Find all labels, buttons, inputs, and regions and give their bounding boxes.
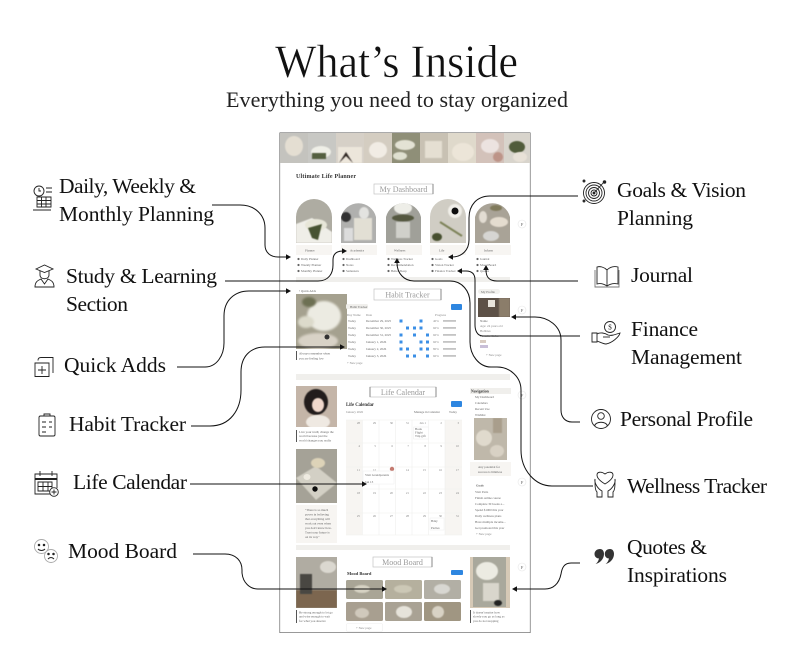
label: daily weekly monthly planning: Monthly Planning [59,202,214,226]
goals list: Get promoted this year [475,526,505,530]
dashboard sublinks: Wellness Tracker [391,257,414,261]
calendar: 20 [390,491,393,495]
arrow: study and learning [225,248,347,281]
quote box: that everything will [305,517,330,521]
label: wellness tracker: Wellness Tracker [627,474,767,498]
dashboard sublinks: Weekly Planner [301,263,322,267]
calendar: Manage in Calendar [414,410,441,414]
goals list: Visit Paris [475,490,489,494]
calendar: 30 [390,421,393,425]
habit table: January 1, 2026 [366,340,387,345]
heading: mood board [373,557,432,567]
calendar: 4 [358,444,360,448]
round side buttons [518,220,526,571]
calendar: 28 [406,514,409,518]
quote text: you do not stopping [473,619,499,623]
dashboard link cards: Planner [305,248,316,252]
label: daily weekly monthly planning [33,174,214,226]
quote text: world changes you really [299,438,332,442]
calendar: 5 [374,444,376,448]
quote text: Live your truth; change the [299,430,334,434]
photo: desk [296,557,337,608]
quote text: slowly you go as long as [473,614,505,618]
label: mood board: Mood Board [68,539,177,563]
icon: quotation marks [594,549,614,564]
calendar: Jan 1 [419,421,426,425]
goals list: Have multiple income... [475,520,506,524]
mood board gallery: Mood Board [347,571,372,576]
habit table: Today [348,333,356,337]
dashboard sublinks: Recommendation [391,263,414,267]
habit table: Today [348,326,356,330]
heading: life calendar: Life Calendar [381,388,425,397]
calendar: Life Calendar [346,403,374,408]
calendar: Flight [415,430,423,434]
dashboard sublinks: Better Sleep [391,269,407,273]
calendar: 27 [390,514,393,518]
calendar: 25 [357,514,360,518]
dashboard sublinks: Semesters [346,269,360,273]
my profile card: Hobbies [480,329,491,333]
my profile card: Age: 24 years old [480,324,503,328]
quote text [296,610,333,623]
dashboard link cards: Wellness [394,248,406,252]
calendar: 12 [373,468,376,472]
calendar: 8 [424,444,426,448]
navigation sidebar: My Dashboard [475,395,494,399]
label: goals and vision [583,178,746,230]
panel: planner screenshot [280,132,530,633]
calendar: 26 [373,514,376,518]
calendar: 31 [406,421,409,425]
calendar: 17 [456,468,459,472]
profile photo [478,298,510,317]
habit table: December 31, 2025 [366,333,391,338]
subtitle: Everything you need to stay organized [226,87,568,112]
habit table: 60% [433,333,439,337]
calendar: 19 [373,491,376,495]
arrow: finance [457,268,580,336]
navigation sidebar: Any potential for [478,465,501,469]
calendar: 18 [357,491,360,495]
calendar: Visit Grandparents [365,473,390,477]
habit table: 60% [433,340,439,344]
icon: graduate [35,265,54,287]
navigation sidebar: Wishlist [475,413,486,417]
dashboard sublinks: Goals [435,257,443,261]
quote box: "There is so much [305,508,329,512]
calendar: 24 [456,491,459,495]
quote box: on its way" [305,535,320,539]
label: personal profile: Personal Profile [620,407,753,431]
my profile card: Favorite Color [480,334,500,338]
habit table: Today [348,340,356,344]
icon: clock and grid [33,186,52,210]
dashboard sublinks: Finance Tracker [435,269,457,273]
my profile card [478,289,510,357]
quote box [296,505,337,543]
quote box: power in believing [305,512,329,516]
round side buttons: F [521,480,524,485]
dashboard sublinks: Journal [480,257,489,261]
label: quick adds: Quick Adds [64,353,166,377]
photo: white flowers [296,294,347,349]
arch photo: inform [475,203,510,243]
quote text [296,430,334,442]
calendar: 10 [456,444,459,448]
habit table: 40% [433,319,439,323]
navigation sidebar: Recent Use [475,407,490,411]
calendar: 7 [407,444,409,448]
dashboard sublinks: Monthly Planner [301,269,323,273]
label: finance management: Finance [631,317,698,341]
label: finance management: Management [631,345,742,369]
calendar: Today [449,410,457,414]
label: goals and vision: Goals & Vision [617,178,746,202]
round side buttons: F [521,393,524,398]
label: habit tracker: Habit Tracker [69,412,186,436]
goals list: Spend $1000 this year [475,508,504,512]
arrow: habit tracker [191,344,345,426]
arch photo: life [430,199,466,243]
icon: open book [595,267,619,287]
label: quotes and inspirations [594,535,727,587]
calendar: 15 [423,468,426,472]
calendar: 16 [439,468,442,472]
quote text: It doesn't matter how [473,610,501,614]
heading: mood board: Mood Board [382,558,423,567]
my profile card: My Profile [481,290,495,294]
calendar: Bday [431,519,438,523]
navigation sidebar: Calendars [475,401,489,405]
calendar: 6 [391,444,393,448]
navigation sidebar [470,388,511,476]
dashboard sublinks: Daily Planner [301,257,320,261]
arch photo: wellness [386,203,421,243]
habit table: 60% [433,326,439,330]
label: quotes and inspirations: Quotes & [627,535,707,559]
icon: person in circle [592,410,610,428]
label: study and learning: Study & Learning [66,264,217,288]
quote text: for what you deserve [299,619,326,623]
arrow: quotes and inspirations [512,563,580,592]
label: daily weekly monthly planning: Daily, Weekly & [59,174,196,198]
habit table: December 29, 2025 [366,319,391,324]
arrow: quick adds [177,288,291,367]
dashboard sublinks: Vision Tracker [435,263,455,267]
round side buttons: F [521,565,524,570]
calendar: Jan 13 [365,480,374,484]
photo: flatlay table [296,449,337,503]
banner photo strip [280,133,530,163]
goals list [475,484,506,536]
navigation sidebar: success is limitless [478,470,503,474]
planner name: Ultimate Life Planner [296,174,356,180]
calendar: 29 [373,421,376,425]
calendar: 28 [357,421,360,425]
heading: life calendar [370,387,436,397]
dashboard sublinks [297,257,497,273]
goals list: Daily wellness plans [475,514,502,518]
quote text: world because just the [299,434,328,438]
dashboard sublinks: Dashboard [346,257,360,261]
arrow: life calendar [190,481,367,487]
habit table: December 30, 2025 [366,326,391,331]
icon: stacked squares with plus [35,358,53,376]
goals list: Goals [476,484,485,488]
round side buttons: F [521,222,524,227]
label: life calendar: Life Calendar [73,470,187,494]
arrow: personal profile [511,314,580,422]
calendar: 2 [440,421,442,425]
goals list: + New page [476,532,492,536]
calendar: Book [415,427,422,431]
habit table: January 2, 2026 [366,347,387,352]
mood board gallery [346,570,463,632]
arrow: daily weekly monthly planning [212,205,291,260]
habit table: + New page [347,361,363,365]
calendar: 14 [406,468,409,472]
title: What’s Inside [275,36,518,88]
my profile card: + New page [486,353,502,357]
calendar: Parties [431,526,440,530]
heading: my dashboard: My Dashboard [380,185,427,194]
label: journal: Journal [631,263,693,287]
quick adds column: • Quick Adds [299,289,317,293]
calendar: 22 [423,491,426,495]
quote text: Be strong enough to let go [299,610,333,614]
quote text [470,610,505,623]
arch photo: planner [296,199,332,243]
icon: hand with coin: $ [608,324,612,332]
calendar [346,401,462,535]
calendar: 21 [406,491,409,495]
dashboard link cards: Life [439,248,445,252]
habit table: Progress [435,313,447,317]
arch photo: academics [341,203,376,243]
navigation sidebar: Navigation [471,390,490,394]
dashboard sublinks: Quotes [480,269,490,273]
quick adds column: you are feeling low [299,356,324,360]
calendar: 11 [357,468,360,472]
habit table: 60% [433,354,439,358]
quick adds column [296,289,347,360]
mood board gallery: + New page [356,626,372,630]
quote box: work out even when [305,522,331,526]
label: study and learning [35,264,217,316]
round side buttons: F [521,308,524,313]
label: finance management [592,317,742,369]
calendar: January 2026 [346,410,363,414]
arrow: journal [483,265,578,281]
habit table [346,304,462,365]
icon: clipboard [39,414,55,436]
calendar: 31 [456,514,459,518]
photo: ceramics [474,418,507,460]
my profile card: Name [480,319,488,323]
arrow: wellness tracker [394,258,593,486]
quick adds column: Always remember when [299,352,331,356]
dashboard link cards [296,245,511,255]
photo: illustrated girl [296,386,337,429]
dashboard link cards: Academics [350,248,365,252]
calendar: 9 [440,444,442,448]
quote box: Trust your future is [305,530,330,534]
calendar: Trip gift [415,434,426,438]
label: goals and vision: Planning [617,206,693,230]
habit table: Today [348,347,356,351]
heading: habit tracker [374,289,441,300]
icon: calendar with plus [35,471,58,496]
icon: target [583,180,606,204]
dashboard sublinks: Mood Board [480,263,497,267]
calendar: 29 [423,514,426,518]
label: quotes and inspirations: Inspirations [627,563,727,587]
habit table: Day Name [347,313,361,317]
goals list: Complete 30 books a... [475,502,505,506]
arrow: goals and vision [448,196,578,260]
icon: hand with coin [592,322,620,344]
label: life calendar [35,470,187,496]
label: journal [595,263,693,287]
habit table: Today [348,319,356,323]
heading: habit tracker: Habit Tracker [385,290,430,300]
dashboard link cards: Inform [484,248,493,252]
photo: white bouquet [470,557,510,608]
quote text: and wise enough to wait [299,614,330,618]
calendar: 23 [439,491,442,495]
habit table: Habit Tracker [350,305,369,309]
label: study and learning: Section [66,292,128,316]
habit table: Date [366,313,373,317]
quote box: you don't know how. [305,526,332,530]
habit table: 80% [433,347,439,351]
icon: smiley and sad faces [34,540,58,562]
arrow: mood board [193,554,387,592]
dashboard sublinks: Notes [346,263,354,267]
divider bands [296,277,510,550]
habit table: January 3, 2026 [366,354,387,359]
calendar: 30 [439,514,442,518]
calendar: 3 [457,421,459,425]
icon: hands holding heart [595,472,615,497]
goals list: Finish online course [475,496,501,500]
habit table: Today [348,354,356,358]
